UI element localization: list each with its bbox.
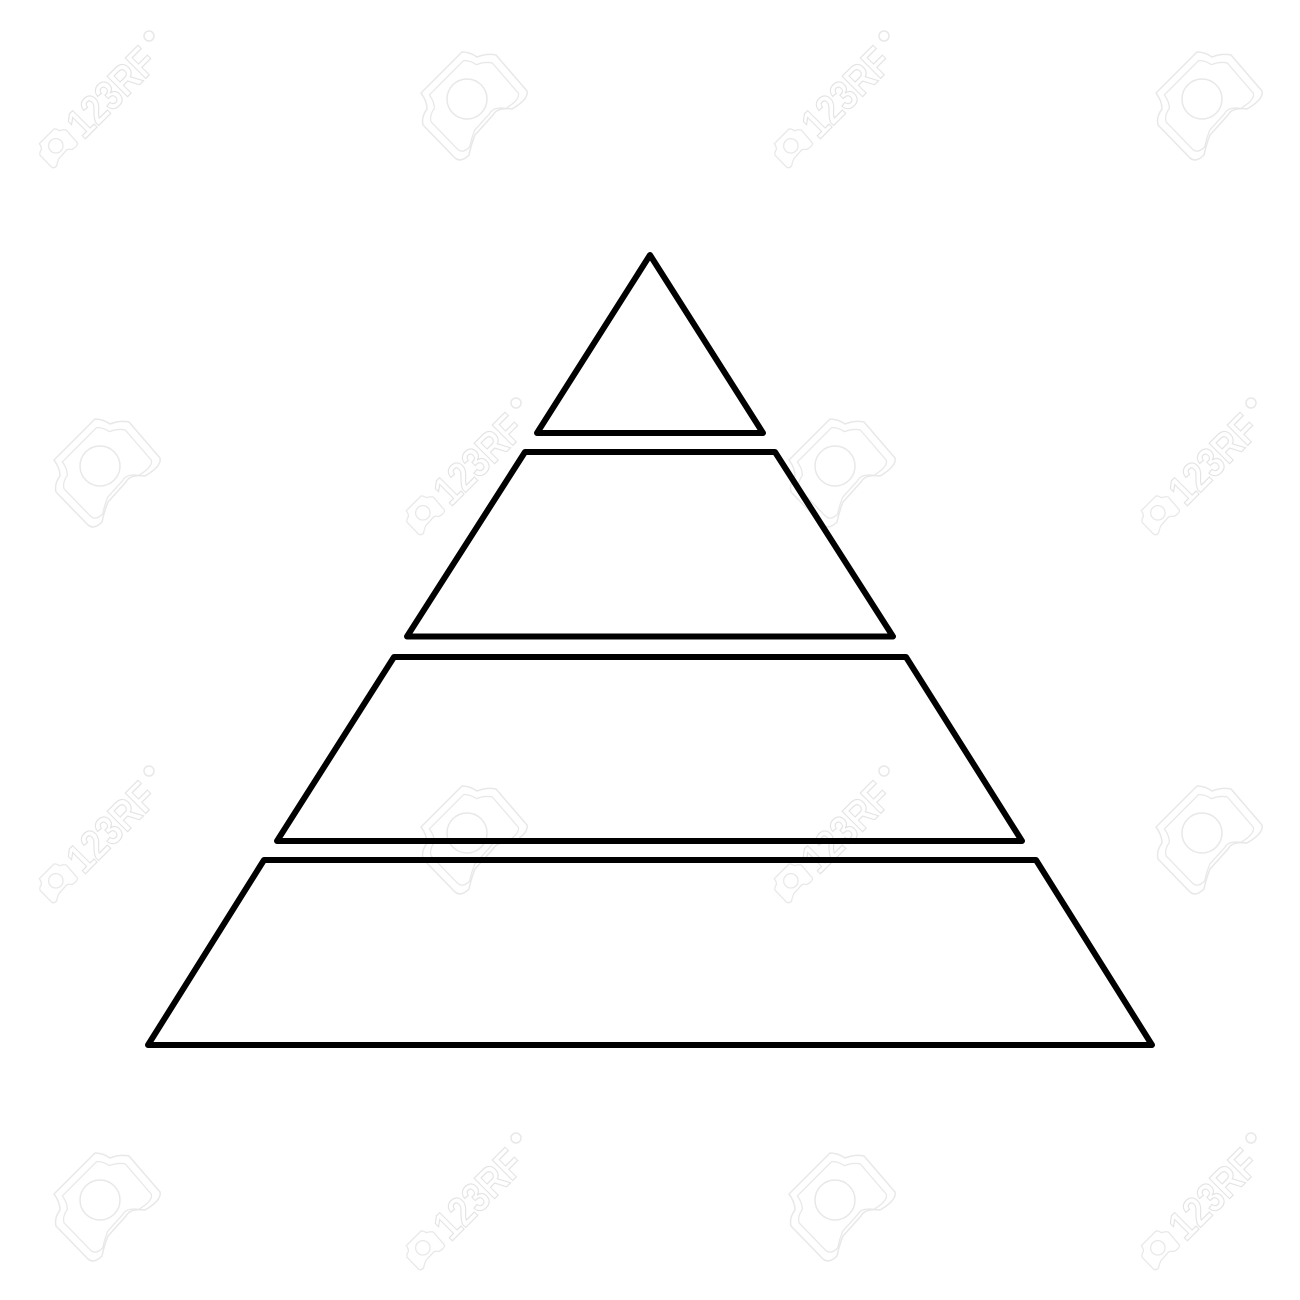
watermark: logo 8	[1141, 1133, 1268, 1270]
watermark: logo 3: 123RF	[424, 405, 533, 514]
watermark: logo 1	[39, 31, 166, 168]
watermark: logo 6: 123RF	[792, 773, 901, 882]
watermark: logo 7	[406, 1133, 533, 1270]
watermark: large egg 2	[1156, 52, 1262, 160]
watermark: logo 6	[774, 766, 901, 903]
watermark: large egg 4	[789, 419, 895, 527]
watermark: logo 8: 123RF	[1159, 1140, 1268, 1249]
watermark: logo 4	[1141, 398, 1268, 535]
watermark: logo 7: 123RF	[424, 1140, 533, 1249]
watermark: large egg 6	[1156, 786, 1262, 894]
watermark: logo 5	[39, 766, 166, 903]
watermark: large egg 1	[421, 52, 527, 160]
watermark: large egg 8	[789, 1153, 895, 1261]
watermark: logo 5: 123RF	[57, 773, 166, 882]
pyramid chart	[148, 255, 1152, 1045]
watermark: large egg 5	[421, 786, 527, 894]
watermark: logo 1: 123RF	[57, 38, 166, 147]
watermark: logo 4: 123RF	[1159, 405, 1268, 514]
pyramid tier 1: top triangle	[537, 255, 763, 433]
watermark: logo 3	[406, 398, 533, 535]
watermark: large egg 7	[54, 1153, 160, 1261]
watermark: logo 2: 123RF	[792, 38, 901, 147]
pyramid tier 4: base	[148, 860, 1152, 1045]
watermark: logo 2	[774, 31, 901, 168]
pyramid tier 2	[407, 452, 893, 636]
watermark: large egg 3	[54, 419, 160, 527]
pyramid tier 3	[277, 657, 1022, 841]
